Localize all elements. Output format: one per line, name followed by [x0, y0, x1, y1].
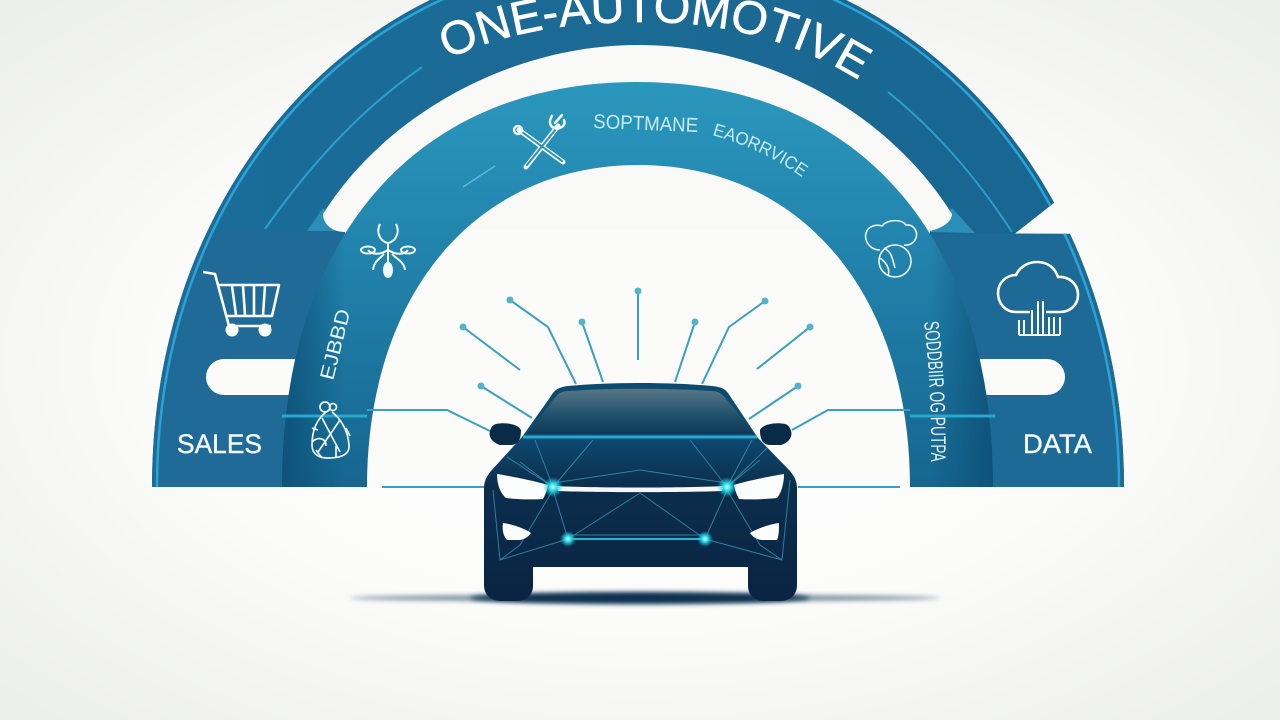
glowing nodes	[543, 477, 737, 547]
band tail right	[928, 208, 975, 233]
car	[484, 383, 797, 601]
outer edge stripe	[157, 0, 1119, 487]
mirror left	[490, 423, 521, 445]
infographic canvas	[152, 0, 1124, 628]
network lines	[367, 291, 910, 487]
icon: shopping cart	[203, 272, 279, 336]
inner arch opening	[345, 230, 930, 487]
pill: data	[960, 359, 1065, 395]
icon: small cloud and globe	[866, 221, 917, 277]
network nodes	[460, 288, 814, 390]
icon: tangled figure	[312, 402, 350, 458]
circuit lines	[493, 440, 790, 560]
left arch vertical text: EJBBD	[317, 307, 355, 382]
outer arch	[150, 0, 1125, 487]
inner arch right shading	[941, 256, 993, 487]
label: software: SOPTMANE	[594, 114, 698, 132]
windshield	[527, 389, 755, 434]
label: data: DATA	[1023, 429, 1092, 459]
lower grille line	[568, 538, 705, 540]
cyan rule right	[910, 414, 995, 418]
icon: branching tool	[361, 224, 415, 277]
band tail left	[307, 208, 347, 231]
windshield base line	[523, 436, 757, 438]
white gap between band and inner arch	[323, 45, 952, 232]
band stripe left	[265, 67, 422, 229]
label: sales: SALES	[177, 429, 262, 459]
label: service: EAORRVICE	[714, 124, 808, 177]
headlight right	[734, 474, 784, 499]
inner arch left shading	[282, 255, 334, 487]
inner arch	[282, 82, 995, 487]
ground shadow	[350, 592, 940, 604]
headlight left	[497, 474, 548, 499]
icon: cloud with bars	[998, 262, 1078, 335]
icon: crossed wrench and screwdriver	[514, 115, 565, 167]
mirror right	[760, 423, 791, 445]
panel: data side	[1070, 234, 1124, 483]
band stripe right	[888, 92, 1012, 232]
fog light left	[503, 523, 531, 540]
grille bar	[556, 486, 724, 492]
panel: sales side	[152, 232, 207, 485]
car body	[484, 383, 797, 601]
cyan rule left	[282, 414, 367, 418]
fog light right	[750, 523, 779, 540]
faint arch dash	[463, 166, 495, 187]
pill: sales	[206, 359, 316, 395]
right arch vertical text: SODDBIIR OG PUTPA	[924, 322, 946, 462]
